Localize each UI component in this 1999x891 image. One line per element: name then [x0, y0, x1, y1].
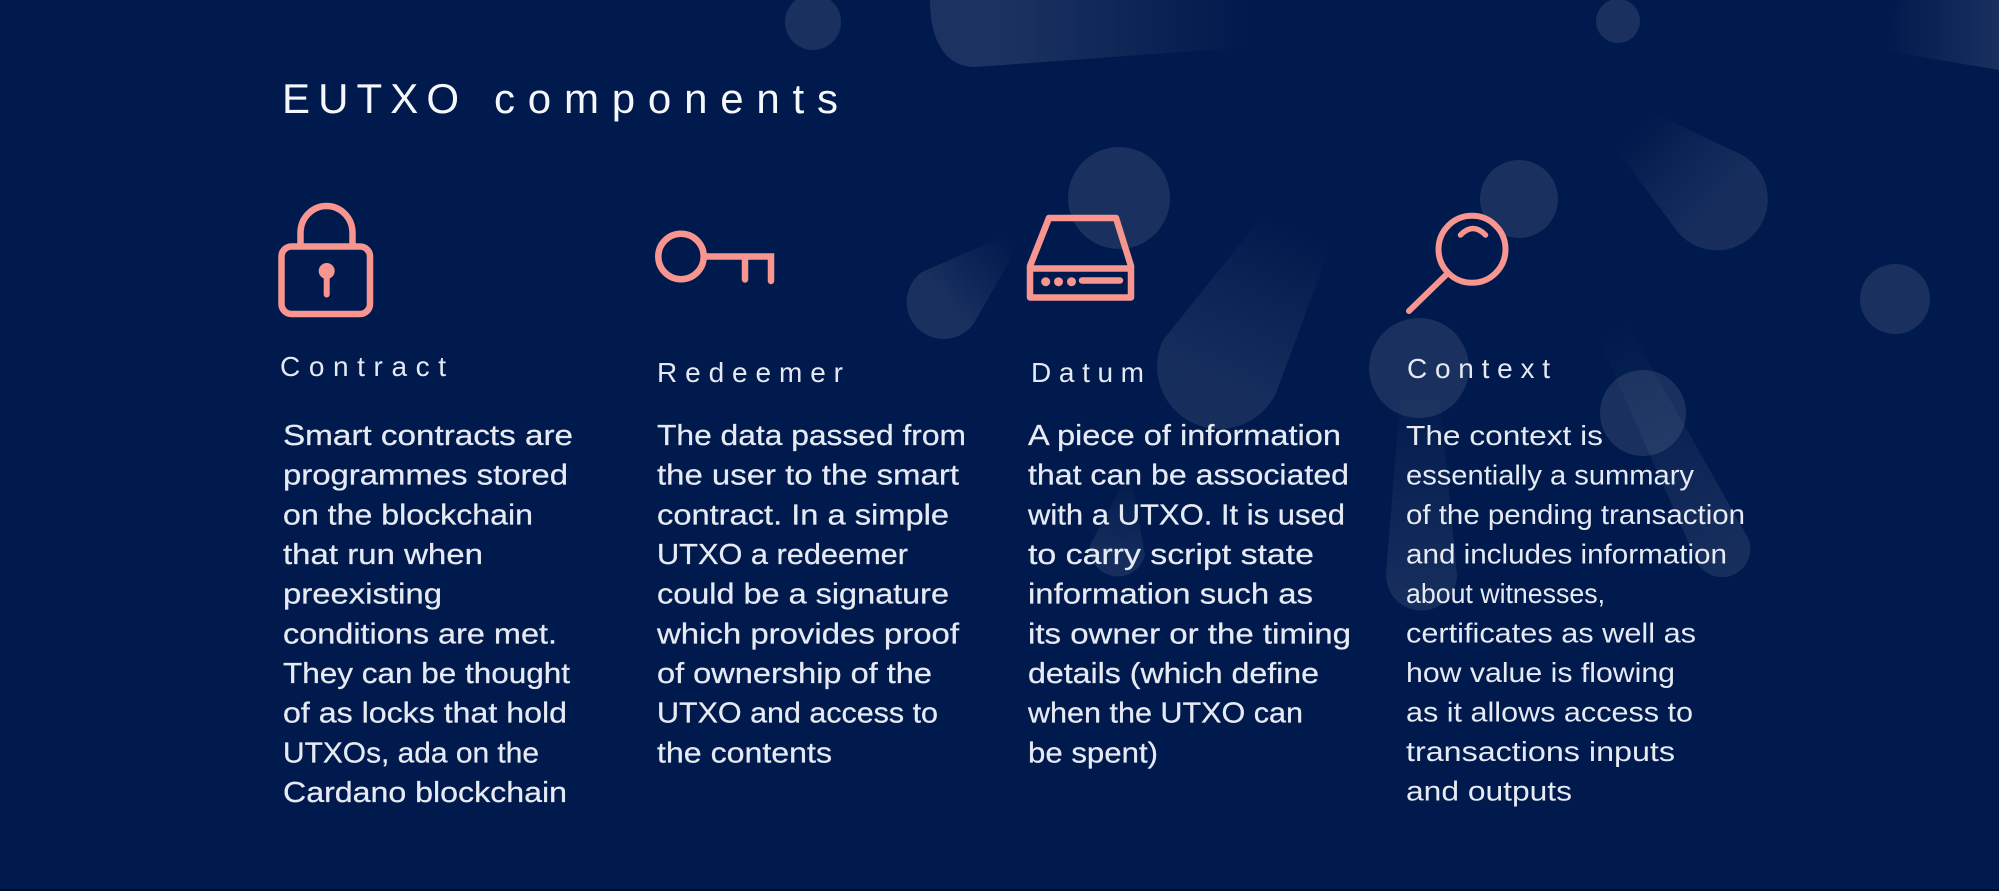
icon: key — [658, 234, 771, 281]
text: Redeemer description: UTXO a redeemer — [657, 539, 908, 571]
text: Redeemer description: UTXO and access to — [657, 698, 938, 730]
text: Datum description: A piece of information — [1028, 420, 1341, 452]
text: Context description: certificates as well as — [1406, 618, 1696, 648]
text: Redeemer description: contract. In a simple — [657, 499, 949, 531]
text: Contract description: that run when — [283, 539, 483, 571]
text: Context description: The context is — [1406, 420, 1603, 451]
text: Datum description — [1027, 420, 1351, 769]
text: Redeemer description: of ownership of the — [657, 658, 932, 690]
text: Redeemer description: could be a signature — [657, 579, 949, 611]
title — [282, 75, 838, 122]
text: Context description: how value is flowing — [1406, 657, 1675, 688]
text: Redeemer description: which provides proof — [656, 618, 960, 650]
column: Datum — [1027, 218, 1351, 769]
label: Contract: Contract — [280, 351, 446, 382]
text: Datum description: to carry script state — [1028, 539, 1314, 571]
icon: storage drive — [1030, 218, 1131, 298]
text: Contract description: They can be thought — [283, 658, 570, 690]
text: Context description: transactions inputs — [1406, 736, 1675, 767]
text: Contract description: conditions are met. — [283, 618, 557, 650]
text: Datum description: information such as — [1028, 579, 1313, 611]
text: Contract description: programmes stored — [283, 460, 568, 492]
text: Contract description: Smart contracts are — [283, 420, 573, 452]
text: Context description: of the pending transaction — [1406, 499, 1745, 530]
text: Context description: about witnesses, — [1406, 578, 1605, 609]
text: Datum description: details (which define — [1028, 658, 1319, 690]
background bubbles and comets — [785, 0, 1999, 610]
text: Contract description: UTXOs, ada on the — [283, 737, 539, 769]
text: Contract description: preexisting — [283, 579, 442, 611]
text: Context description: as it allows access to — [1406, 696, 1693, 728]
text: Context description — [1406, 420, 1745, 806]
text: Redeemer description — [656, 420, 966, 769]
column: Redeemer — [656, 234, 966, 769]
title: components — [494, 75, 838, 122]
text: Context description: essentially a summary — [1406, 460, 1694, 490]
text: Redeemer description: The data passed from — [657, 420, 966, 452]
text: Contract description: of as locks that hold — [283, 698, 567, 730]
text: Redeemer description: the contents — [657, 737, 832, 769]
text: Datum description: its owner or the timing — [1028, 618, 1351, 650]
label: Redeemer: Redeemer — [657, 357, 843, 388]
text: Datum description: be spent) — [1028, 737, 1158, 769]
text: Contract description: on the blockchain — [283, 499, 533, 531]
text: Context description: and includes information — [1406, 538, 1727, 570]
column: Context — [1406, 216, 1745, 807]
text: Redeemer description: the user to the smart — [657, 460, 959, 492]
text: Datum description: with a UTXO. It is used — [1027, 499, 1345, 531]
icon: magnifying glass — [1409, 216, 1506, 311]
column: Contract — [280, 206, 573, 809]
text: Contract description: Cardano blockchain — [283, 777, 567, 809]
title: EUTXO — [282, 75, 459, 122]
icon: padlock — [282, 206, 370, 314]
label: Datum: Datum — [1031, 357, 1144, 388]
text: Contract description — [283, 420, 573, 809]
text: Datum description: that can be associated — [1028, 460, 1349, 492]
text: Datum description: when the UTXO can — [1027, 698, 1303, 730]
label: Context: Context — [1407, 353, 1550, 384]
text: Context description: and outputs — [1406, 776, 1572, 806]
